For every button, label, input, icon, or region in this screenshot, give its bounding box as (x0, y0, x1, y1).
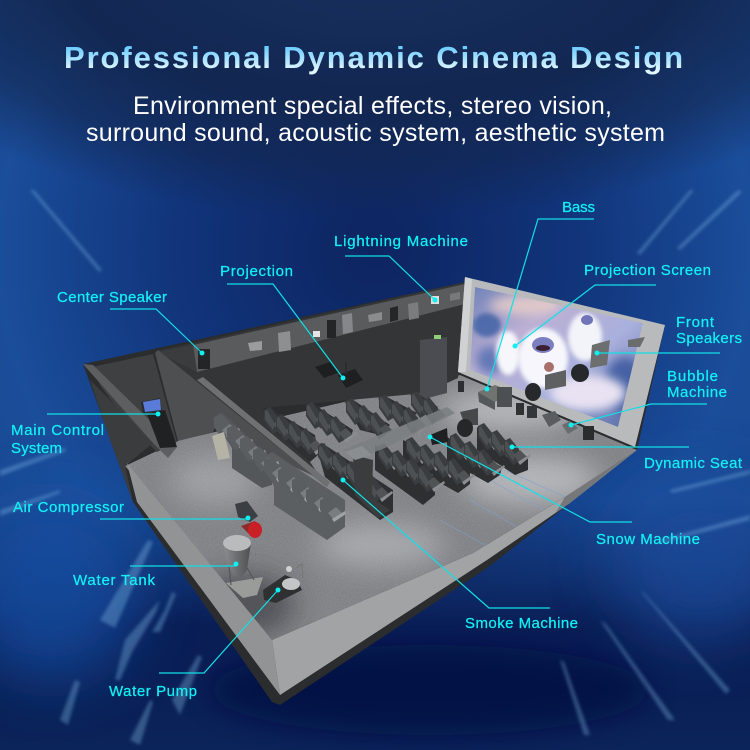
carpet floor (125, 375, 637, 640)
outer shell (83, 282, 665, 705)
label: Dynamic Seat: Dynamic Seat (644, 455, 743, 472)
left and front perimeter walls (127, 450, 637, 695)
subtitle: Environment special effects, stereo vision, (133, 92, 612, 120)
audience seat rows (263, 391, 531, 520)
front dynamic seats platform (343, 407, 478, 518)
label: Snow Machine: Snow Machine (596, 531, 700, 548)
subtitle (86, 92, 665, 147)
cinema model (83, 277, 665, 705)
label: Front Speakers: Front (676, 314, 715, 331)
label: Air Compressor (13, 499, 250, 520)
label: Projection: Projection (220, 263, 293, 280)
control room and divider wall (83, 350, 327, 502)
label: Dynamic Seat (510, 444, 743, 472)
main control console (141, 398, 177, 448)
subtitle: surround sound, acoustic system, aesthetic system (86, 119, 665, 147)
label: Front Speakers (594, 314, 742, 356)
air compressor (235, 501, 262, 538)
label: Main Control System (11, 412, 160, 457)
label: Smoke Machine: Smoke Machine (465, 615, 578, 632)
label: Center Speaker: Center Speaker (57, 289, 167, 306)
label: Water Tank: Water Tank (73, 572, 156, 589)
label: Bass (484, 199, 595, 392)
label: Water Pump: Water Pump (109, 683, 197, 700)
rear seat rows (197, 377, 346, 540)
label: Bubble Machine: Bubble (667, 368, 718, 385)
label: Bass: Bass (562, 199, 595, 216)
label: Lightning Machine: Lightning Machine (334, 233, 468, 250)
label: Projection (220, 263, 346, 380)
label: Projection Screen: Projection Screen (584, 262, 711, 279)
projection screen image (470, 287, 645, 427)
label: Front Speakers: Speakers (676, 330, 742, 347)
screen wall (458, 277, 665, 447)
water pump (263, 564, 303, 603)
label: Bubble Machine (568, 368, 727, 428)
label: Lightning Machine (334, 233, 468, 302)
back wall (157, 282, 465, 487)
label: Bubble Machine: Machine (667, 384, 727, 401)
title: Professional Dynamic Cinema Design (64, 40, 683, 75)
label: Main Control System: Main Control (11, 422, 104, 439)
label: Water Pump (109, 588, 280, 700)
label: Snow Machine (428, 434, 700, 548)
label: Center Speaker (57, 289, 204, 356)
label: Air Compressor: Air Compressor (13, 499, 124, 516)
water tank (223, 535, 263, 598)
wall fixtures (198, 292, 460, 369)
label: Projection Screen (512, 262, 711, 348)
stage equipment (458, 337, 645, 440)
label: Smoke Machine (340, 478, 578, 632)
label: Main Control System: System (11, 440, 62, 457)
projectors (315, 362, 363, 388)
label: Water Tank (73, 562, 238, 589)
